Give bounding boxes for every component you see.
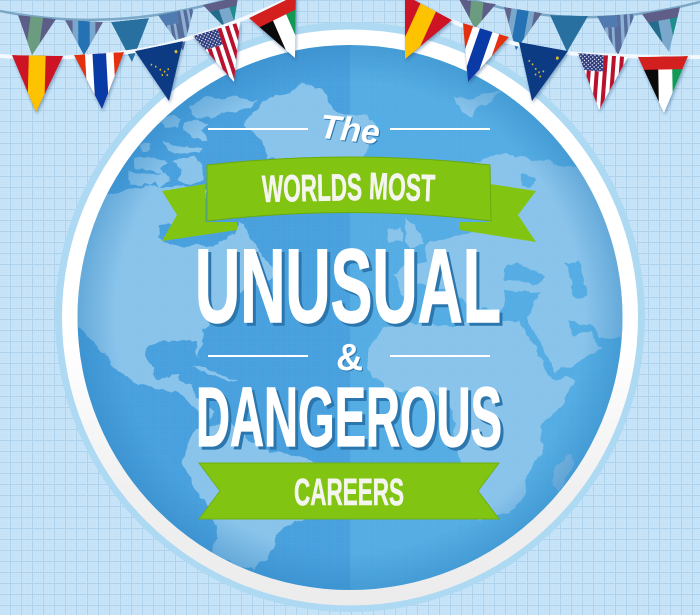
South America	[182, 423, 314, 570]
flag: UAE	[249, 0, 318, 69]
flag: Alaska right	[508, 42, 568, 106]
edge shading	[78, 45, 622, 590]
flag: tricolour	[74, 52, 127, 110]
back row of flags	[13, 0, 688, 64]
top green ribbon	[162, 157, 536, 242]
front row of flags left	[10, 0, 318, 112]
North America	[78, 185, 273, 420]
flag: Spain	[10, 55, 63, 112]
flag: Spain right	[382, 0, 452, 72]
Madagascar	[553, 453, 572, 493]
Britain and Ireland	[405, 217, 424, 247]
flag: USA	[193, 22, 258, 89]
grid on globe	[70, 40, 630, 600]
flag: tricolour right	[445, 23, 509, 89]
flag: Alaska	[135, 41, 193, 106]
world map globe	[60, 40, 640, 600]
bottom green ribbon	[199, 463, 499, 519]
ribbon main band	[207, 157, 491, 221]
Svalbard	[453, 92, 503, 117]
Eurasia	[393, 150, 640, 372]
ribbon left tail	[162, 184, 237, 241]
flag: USA right	[574, 53, 628, 112]
heading: ampersand: &	[336, 337, 363, 379]
front bunting string right	[405, 0, 700, 57]
ribbon text: MOST	[368, 166, 436, 210]
white ring	[62, 30, 638, 606]
ribbon right tail	[460, 184, 536, 242]
back bunting string left	[0, 0, 245, 20]
Greenland	[243, 83, 378, 165]
heading: UNUSUAL: UNUSUAL	[195, 228, 501, 345]
ribbon text: WORLDS	[262, 167, 362, 211]
Africa	[368, 320, 575, 522]
divider lines middle	[208, 355, 490, 357]
inland seas	[504, 173, 588, 299]
front row of flags right	[382, 0, 689, 114]
flag: UAE right	[638, 56, 689, 114]
Caribbean islands	[190, 366, 237, 380]
heading: The: The	[318, 108, 382, 152]
ribbon text: CAREERS: CAREERS	[294, 472, 404, 514]
divider lines top	[208, 128, 490, 130]
front bunting string left	[0, 0, 300, 58]
map land masses	[60, 83, 640, 570]
back bunting string right	[455, 0, 700, 17]
